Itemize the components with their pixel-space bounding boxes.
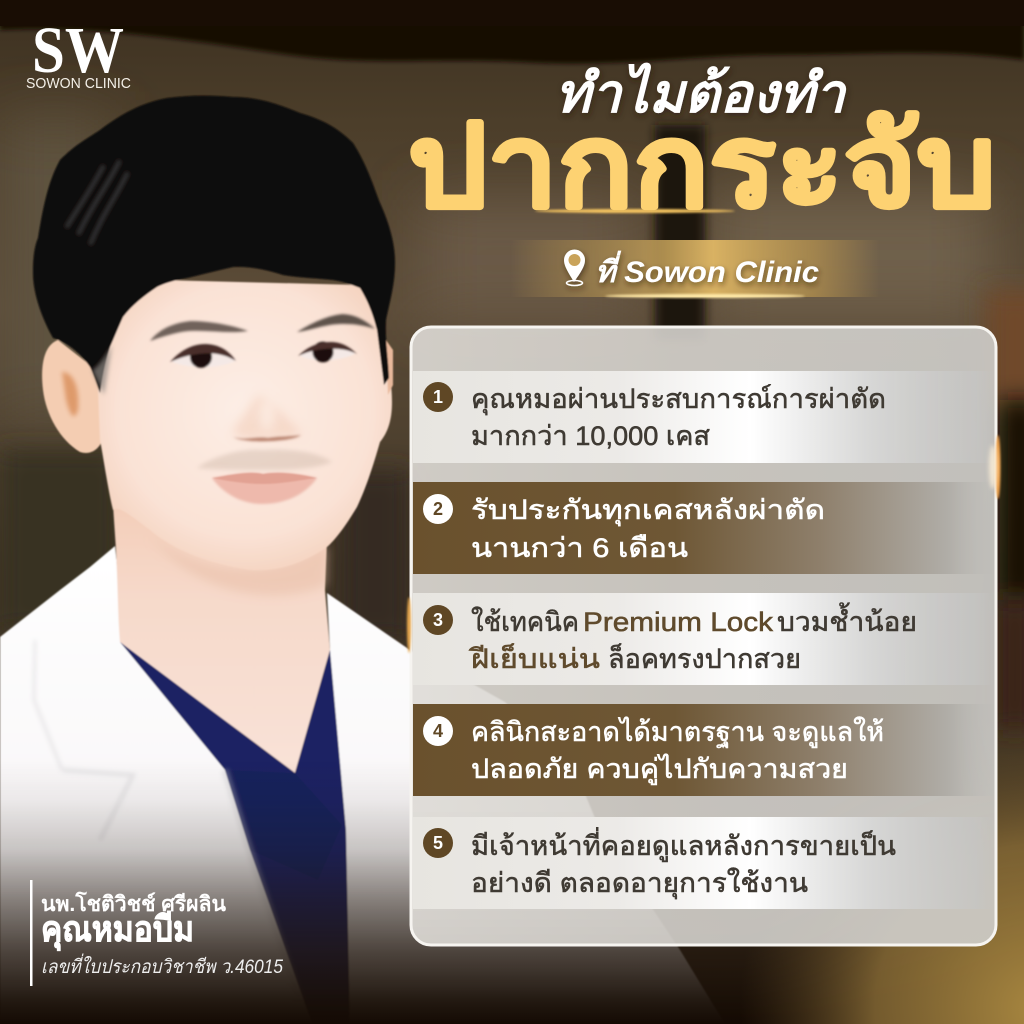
panel: reasons (407, 327, 1000, 945)
bottom dark fade (0, 782, 872, 1024)
row 1: มากกว่า 10,000 เคส (471, 421, 710, 451)
caption rule (30, 880, 32, 986)
row 3 (413, 593, 994, 685)
title line 2: ปากกระจับ (408, 101, 996, 231)
license number: เลขที่ใบประกอบวิชาชีพ ว.46015 (41, 953, 283, 978)
row 1 (413, 371, 994, 463)
row 1: 1 (433, 387, 443, 407)
row 3: ล็อคทรงปากสวย (608, 641, 801, 674)
row 4 (413, 704, 994, 796)
sideburn grey (92, 345, 112, 395)
ear (42, 340, 106, 453)
doctor portrait (0, 96, 725, 1024)
moustache shadow (197, 450, 332, 470)
hair highlights (66, 160, 128, 245)
row 5: อย่างดี ตลอดอายุการใช้งาน (471, 867, 808, 900)
row 3: 3 (433, 610, 443, 630)
panel edge glows (407, 435, 1000, 653)
row 3: บวมช้ำน้อย (777, 602, 917, 637)
nose (232, 395, 302, 439)
row 2: รับประกันทุกเคสหลังผ่าตัด (471, 495, 825, 527)
row 2: นานกว่า 6 เดือน (471, 533, 688, 563)
row 3: ใช้เทคนิค (471, 606, 579, 637)
doctor full name: นพ.โชติวิชช์ ศรีผลิน (41, 891, 227, 916)
lips (212, 473, 317, 504)
coat lapel shading (32, 642, 283, 937)
banner text: ที่ Sowon Clinic (595, 250, 819, 289)
banner band (510, 240, 880, 297)
jaw shadow (174, 546, 333, 596)
row 1: คุณหมอผ่านประสบการณ์การผ่าตัด (471, 383, 886, 416)
row 4: 4 (433, 721, 443, 741)
row 5: 5 (433, 833, 443, 853)
panel card (411, 327, 996, 945)
row 5: มีเจ้าหน้าที่คอยดูแลหลังการขายเป็น (471, 827, 896, 862)
row 4: คลินิกสะอาดได้มาตรฐาน จะดูแลให้ (471, 716, 884, 748)
row 3: ฝีเย็บแน่น (469, 641, 600, 674)
eyes (170, 342, 357, 368)
face (98, 280, 392, 570)
eyebrows (150, 321, 248, 341)
title glow (535, 209, 735, 213)
row 2: 2 (433, 499, 443, 519)
row 3: Premium Lock (583, 607, 774, 637)
coat (0, 546, 725, 1024)
logo monogram: SW (32, 14, 124, 87)
logo wordmark: SOWON CLINIC (26, 75, 131, 92)
title (410, 62, 991, 215)
doctor caption (30, 880, 283, 986)
row 5 (413, 817, 994, 909)
icon: location pin (564, 250, 585, 286)
row 2 (413, 482, 994, 574)
background: gold glow bottom right (740, 710, 1024, 1024)
neck (113, 500, 345, 773)
title line 1: ทำไมต้องทำ (555, 62, 848, 124)
location banner (510, 240, 880, 298)
row 4: ปลอดภัย ควบคู่ไปกับความสวย (471, 754, 848, 785)
doctor nickname: คุณหมอบีม (41, 910, 194, 951)
hair (33, 96, 395, 393)
logo (26, 14, 131, 92)
right ear sliver (386, 340, 393, 395)
navy scrub (120, 642, 350, 1024)
banner glow (605, 294, 805, 298)
